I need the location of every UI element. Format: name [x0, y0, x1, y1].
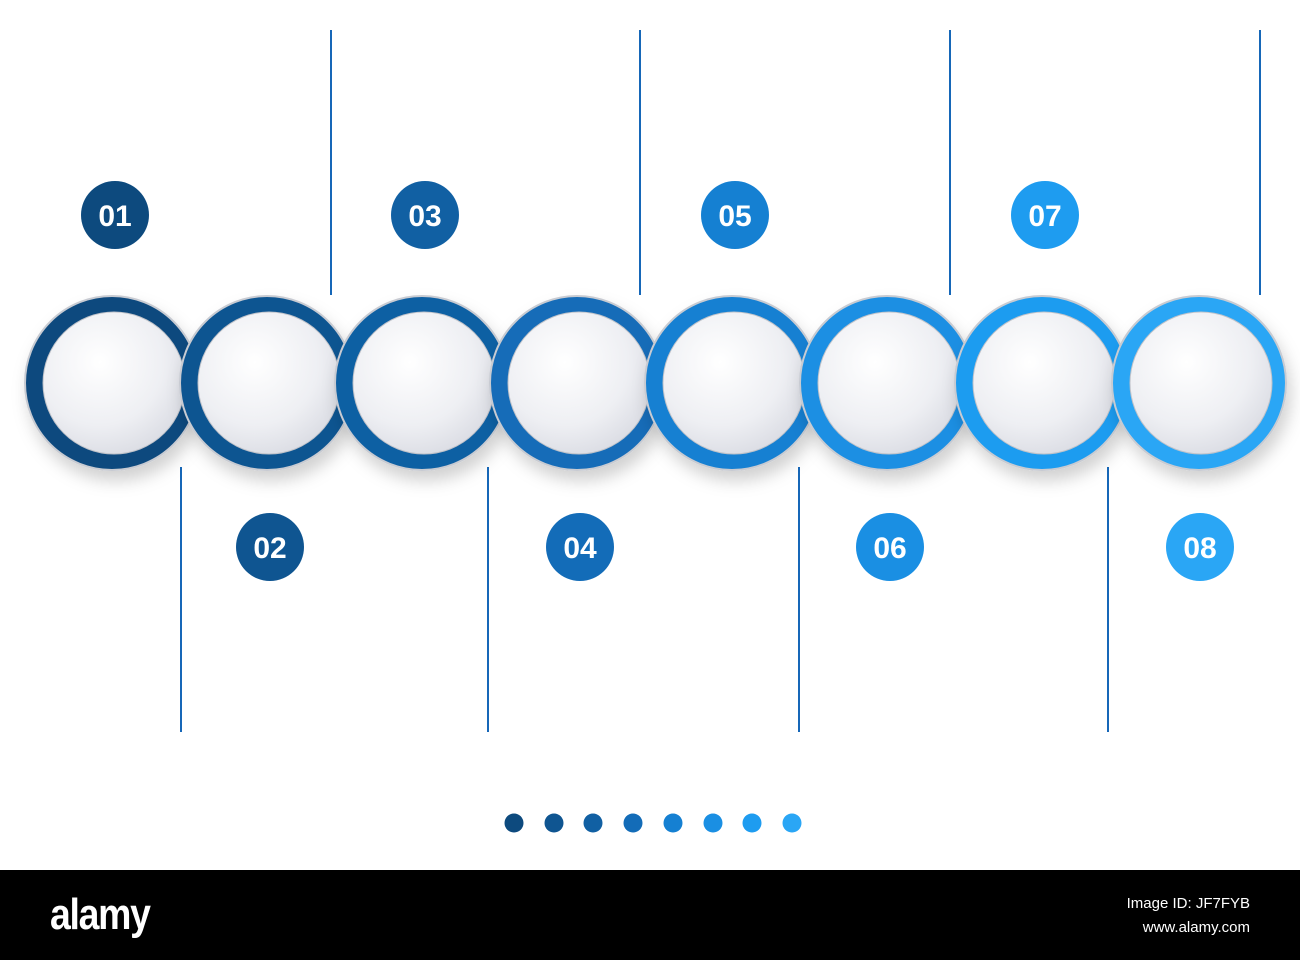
pagination dots [504, 814, 802, 832]
ring 8 [1112, 296, 1286, 470]
ring 2 [180, 296, 354, 470]
ring 6 [800, 296, 974, 470]
image id: Image ID: JF7FYB [1127, 895, 1250, 912]
number badges [81, 181, 1234, 581]
footer bar [0, 870, 1300, 960]
number badges: 04 [563, 532, 597, 565]
ring 4 [490, 296, 664, 470]
ring 5 [645, 296, 819, 470]
image id [1127, 895, 1250, 936]
number badges: 07 [1028, 200, 1062, 233]
connector lines [181, 30, 1260, 732]
ring 3 [335, 296, 509, 470]
number badges: 05 [718, 200, 752, 233]
ring 1 [25, 296, 199, 470]
number badges: 06 [873, 532, 907, 565]
number badges: 08 [1183, 532, 1217, 565]
number badges: 01 [98, 200, 132, 233]
ring 7 [955, 296, 1129, 470]
image id: www.alamy.com [1143, 919, 1250, 936]
number badges: 03 [408, 200, 442, 233]
number badges: 02 [253, 532, 287, 565]
logo: alamy [50, 890, 150, 939]
